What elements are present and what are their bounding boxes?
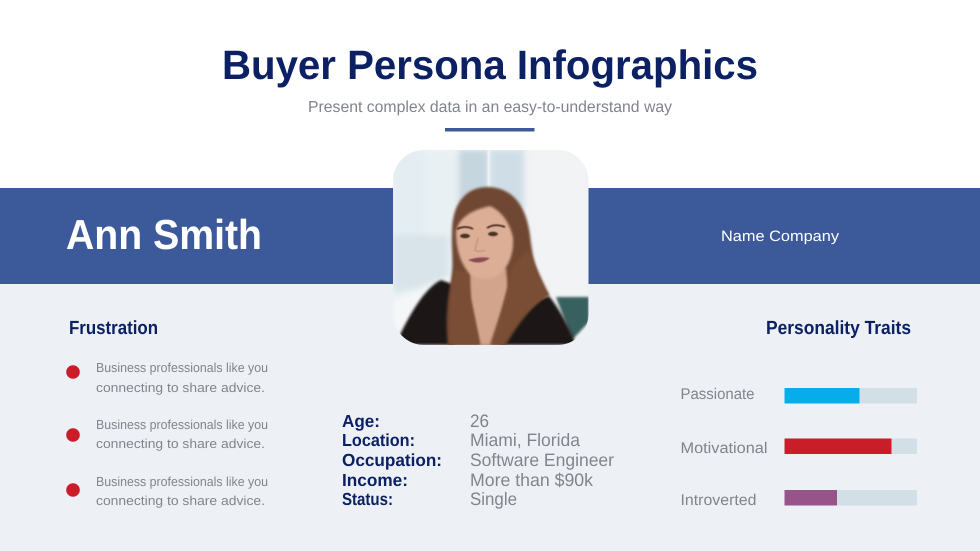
age row: 26	[470, 411, 489, 431]
location row: Miami, Florida	[470, 430, 581, 450]
persona name: Ann Smith	[66, 211, 262, 258]
age row	[342, 411, 489, 431]
status row	[342, 489, 517, 509]
income row: More than $90k	[470, 470, 594, 490]
bullet 1: connecting to share advice.	[96, 380, 265, 395]
trait bar: passionate	[680, 386, 917, 404]
occupation row: Software Engineer	[470, 450, 614, 470]
bullet 1	[66, 360, 268, 395]
name banner	[0, 188, 980, 284]
occupation row	[342, 450, 614, 470]
income row	[342, 470, 594, 490]
hair back	[447, 187, 549, 345]
lower panel background	[0, 284, 980, 551]
eyes, brows and lips	[457, 225, 505, 263]
portrait photo	[393, 150, 589, 345]
panel: personality traits	[680, 318, 917, 509]
bullet 1: Business professionals like you	[96, 360, 268, 375]
panel: frustration	[66, 318, 268, 508]
title underline	[445, 128, 534, 132]
bullet 2: Business professionals like you	[96, 417, 268, 432]
trait bar: motivational	[680, 438, 917, 457]
bullet 2	[66, 417, 268, 451]
neck and chest	[470, 268, 508, 345]
bullet 3: Business professionals like you	[96, 474, 268, 489]
bullet 3	[66, 474, 268, 508]
bullet 3: connecting to share advice.	[96, 493, 265, 508]
trait bar: introverted: Introverted	[680, 492, 756, 509]
chair	[556, 297, 589, 340]
heading: frustration: Frustration	[69, 318, 158, 339]
panel: demographics	[342, 411, 614, 509]
heading: personality traits: Personality Traits	[766, 318, 911, 339]
bullet 2: connecting to share advice.	[96, 436, 265, 451]
hair front strands	[450, 250, 549, 345]
jacket	[398, 280, 576, 345]
title: Buyer Persona Infographics	[222, 42, 758, 88]
location row: Location:	[342, 430, 415, 450]
status row: Single	[470, 489, 517, 509]
trait bar: motivational: Motivational	[680, 440, 768, 457]
status row: Status:	[342, 489, 393, 509]
location row	[342, 430, 581, 450]
subtitle: Present complex data in an easy-to-understand way	[308, 99, 672, 116]
trait bar: passionate: Passionate	[680, 386, 754, 403]
occupation row: Occupation:	[342, 450, 442, 470]
age row: Age:	[342, 411, 380, 431]
trait bar: introverted	[680, 490, 917, 509]
company name: Name Company	[721, 228, 840, 245]
income row: Income:	[342, 470, 408, 490]
face	[456, 206, 513, 279]
